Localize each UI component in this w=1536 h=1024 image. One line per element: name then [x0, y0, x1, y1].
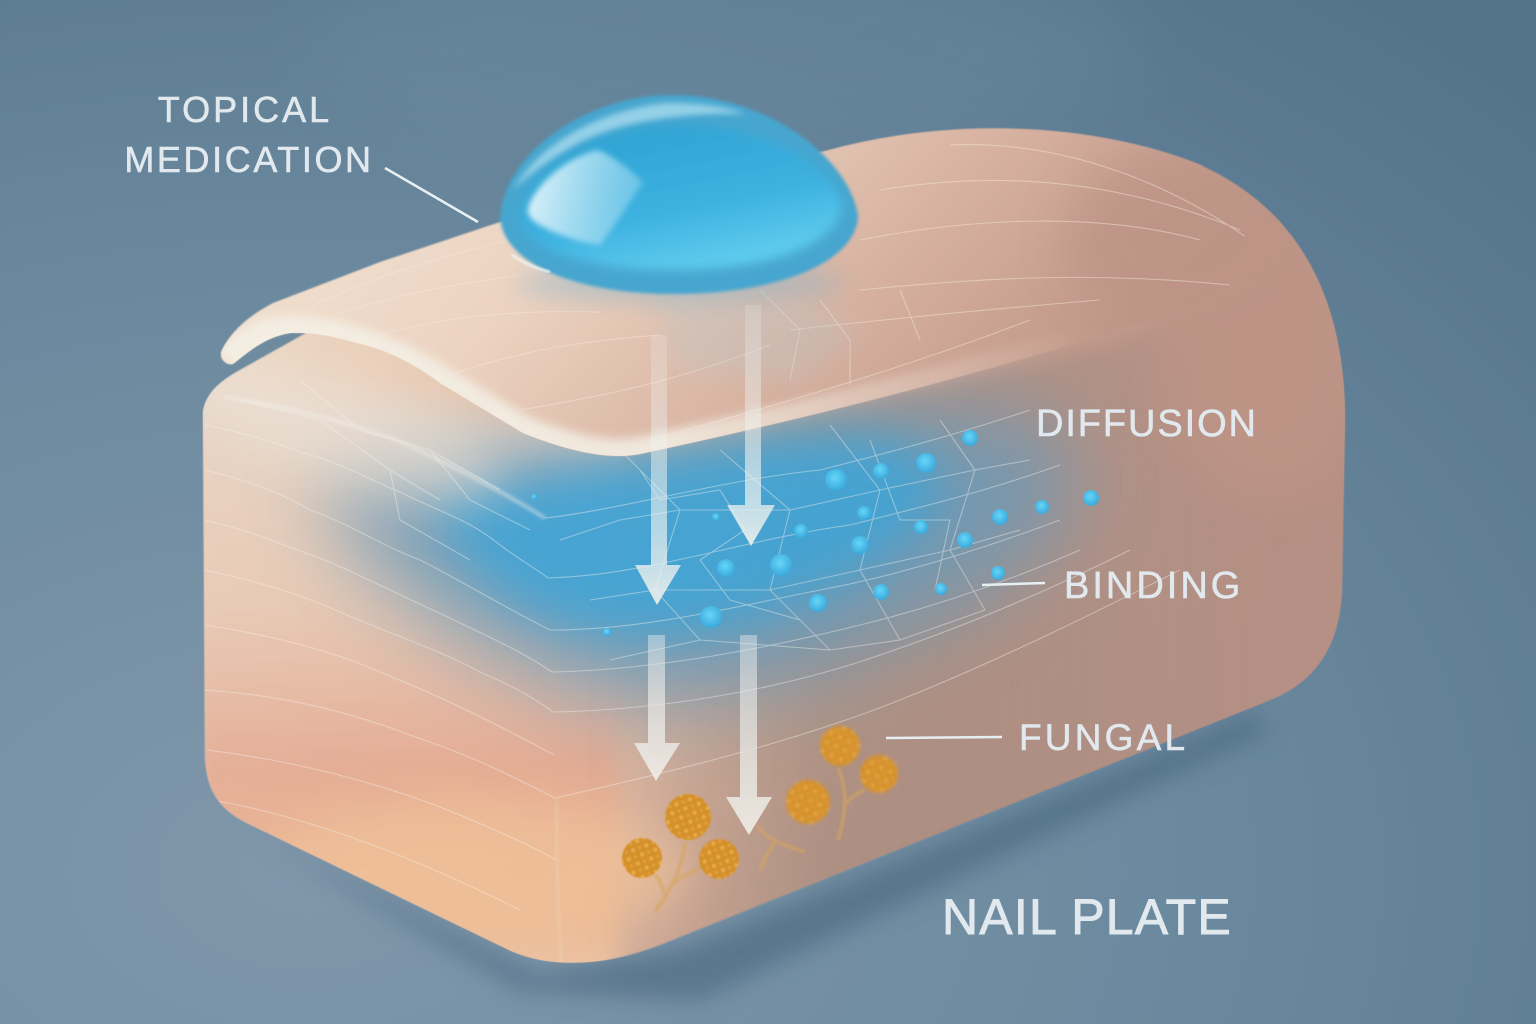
label: topical medication: TOPICAL — [158, 89, 332, 130]
nail block illustration — [163, 129, 1380, 1000]
droplet base lip — [512, 255, 550, 272]
strata lines — [205, 380, 1180, 910]
fungal stems — [655, 768, 865, 912]
label: binding: BINDING — [1064, 565, 1243, 607]
leader line: binding — [982, 583, 1045, 585]
label: nail plate: NAIL PLATE — [942, 889, 1232, 945]
label: diffusion: DIFFUSION — [1036, 403, 1258, 445]
icon: fungal growth — [622, 726, 898, 912]
arrow: lower left — [634, 635, 680, 781]
block body — [203, 129, 1345, 963]
diffusing medication particles — [531, 430, 1099, 636]
fungal spores: rear cluster — [786, 726, 898, 824]
label: fungal: FUNGAL — [1019, 717, 1188, 758]
arrow: upper right — [727, 305, 775, 546]
vertical corner highlight — [556, 800, 562, 965]
droplet rim light — [513, 103, 745, 190]
arrow: upper left — [635, 335, 681, 605]
ground shadow — [250, 715, 1270, 1000]
flap detail — [228, 145, 1310, 456]
droplet body — [520, 125, 842, 270]
fungal spores: front cluster — [622, 794, 739, 879]
cuticle flap — [221, 129, 1245, 456]
leader line: topical medication — [385, 168, 478, 222]
label: topical medication: MEDICATION — [124, 139, 374, 180]
icon: medication droplet — [500, 95, 858, 294]
droplet highlight — [528, 150, 643, 245]
block shading and cross-section — [203, 172, 1345, 963]
leader line: fungal — [886, 737, 1002, 738]
drop contact shadow — [515, 265, 845, 301]
blue diffusion zone — [320, 409, 1072, 705]
block ridge highlight — [223, 397, 545, 518]
arrow: lower right — [726, 635, 772, 835]
